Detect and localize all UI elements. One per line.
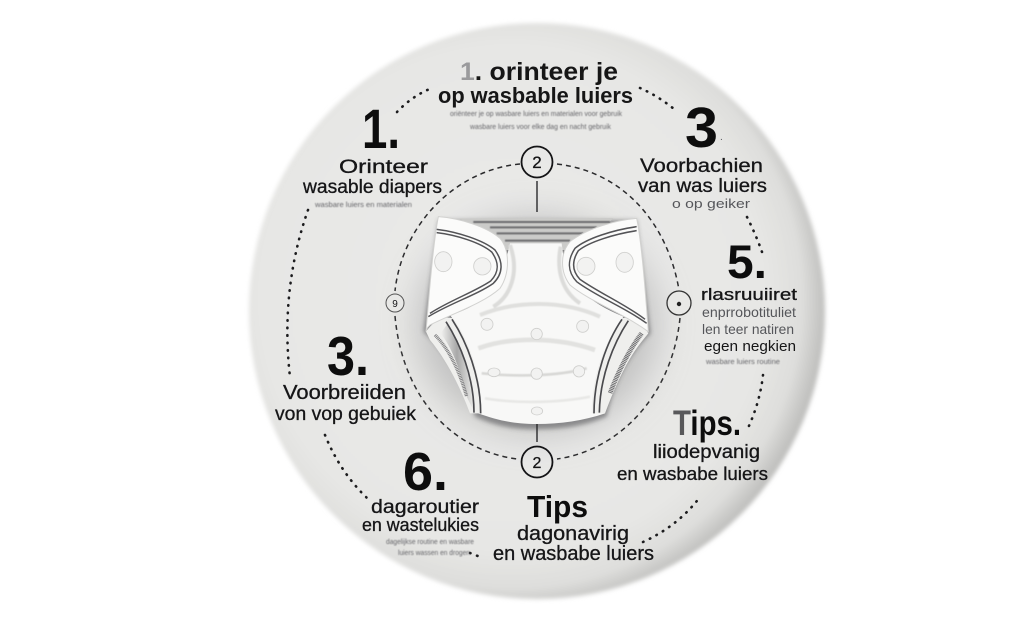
tips right: liiodepvanig	[653, 442, 760, 463]
step 3 top right: o op geiker	[672, 196, 751, 211]
diaper back waistband	[460, 218, 613, 250]
step 5: enprrobotituliet	[702, 304, 796, 320]
step 5: rlasruuiiret	[701, 285, 797, 304]
circle marker bottom	[522, 424, 552, 478]
diaper right leg opening	[592, 318, 648, 413]
diaper close shadow	[423, 220, 651, 429]
step 6: en wastelukies	[362, 515, 479, 535]
step 5: 5.	[727, 235, 767, 288]
diaper folds	[478, 245, 600, 402]
step 3 top right: 3	[685, 96, 718, 160]
background disc	[249, 23, 825, 599]
diaper right tab	[562, 218, 648, 332]
step 6	[362, 442, 480, 557]
diaper left tab	[426, 217, 507, 332]
diaper left leg opening	[426, 318, 482, 413]
step 3 left: von vop gebuiek	[275, 404, 416, 425]
step 6: 6.	[403, 442, 448, 502]
circle marker left	[386, 294, 404, 312]
step 5: egen negkien	[704, 339, 796, 355]
diaper wide shadow	[417, 217, 657, 433]
step 3 left	[275, 325, 416, 425]
top title block: 1. orinteer je	[460, 58, 618, 86]
step 3 top right: .	[720, 132, 723, 143]
step 3 left: 3.	[327, 325, 369, 387]
circle marker top: 2	[532, 153, 542, 172]
step 1: Orinteer	[339, 157, 429, 178]
outer dotted connector arcs	[287, 88, 763, 558]
step 1: wasable diapers	[302, 177, 442, 198]
step 6: dagaroutier	[371, 497, 480, 518]
top title block	[438, 58, 633, 131]
step 3 top right: van was luiers	[638, 176, 767, 197]
tips bottom: dagonavirig	[517, 523, 629, 545]
tips bottom: en wasbabe luiers	[493, 543, 654, 565]
tips right	[617, 404, 768, 484]
circle marker bottom: 2	[533, 455, 542, 472]
step 1: 1.	[362, 97, 400, 160]
step 5	[701, 235, 797, 366]
diaper body	[450, 243, 623, 424]
step 5: wasbare luiers routine	[705, 359, 780, 366]
inner dashed ring	[395, 164, 680, 459]
tips bottom: Tips	[527, 489, 588, 524]
step 1	[302, 97, 442, 209]
diaper snaps	[435, 252, 633, 415]
top title block: oriënteer je op wasbare luiers en materialen voor gebruik	[450, 111, 622, 118]
step 3 top right	[638, 96, 767, 211]
circle marker top	[522, 146, 552, 212]
tips right: Tips.	[673, 404, 741, 443]
circle marker right	[667, 291, 691, 315]
tips right: en wasbabe luiers	[617, 464, 768, 484]
step 6: luiers wassen en drogen	[398, 550, 470, 557]
step 3 top right: Voorbachien	[640, 156, 763, 177]
step 1: wasbare luiers en materialen	[314, 202, 412, 209]
top title block: wasbare luiers voor elke dag en nacht gebruik	[469, 124, 611, 131]
diaper illustration	[417, 217, 657, 433]
step 6: dagelijkse routine en wasbare	[386, 539, 474, 546]
step 5: len teer natiren	[702, 321, 794, 337]
tips bottom	[493, 489, 654, 565]
top title block: op wasbable luiers	[438, 83, 633, 108]
step 3 left: Voorbreiiden	[283, 382, 406, 404]
circle marker left: 9	[392, 299, 398, 310]
